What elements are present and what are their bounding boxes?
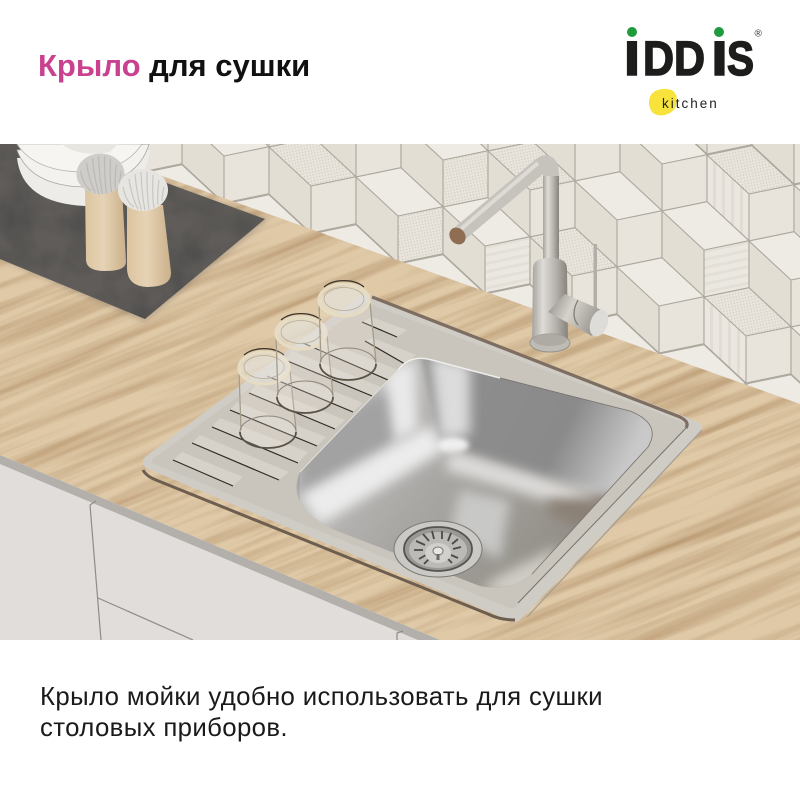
slate board bbox=[0, 144, 270, 324]
overflow slots bbox=[352, 423, 373, 447]
logo: iDDiS kitchen bbox=[624, 27, 762, 115]
description text: Крыло мойки удобно использовать для сушки bbox=[40, 683, 603, 711]
drain strainer bbox=[394, 521, 482, 577]
faucet spout bbox=[458, 163, 551, 262]
logo wordmark: D bbox=[643, 33, 674, 86]
drinking glass 2 bbox=[275, 314, 333, 413]
yellow blob bbox=[649, 89, 677, 115]
logo green dot right bbox=[714, 27, 724, 37]
wooden countertop bbox=[0, 176, 800, 640]
logo wordmark: S bbox=[727, 33, 754, 86]
faucet handle bbox=[548, 294, 608, 336]
rim grooves bbox=[143, 470, 515, 620]
faucet body bbox=[532, 258, 568, 342]
logo subtitle: kitchen bbox=[662, 96, 719, 111]
drinking glass 1 bbox=[238, 349, 296, 448]
faucet bbox=[446, 163, 612, 352]
drinking glass 3 bbox=[318, 281, 376, 380]
logo wordmark: D bbox=[674, 33, 705, 86]
logo wordmark: I bbox=[624, 33, 640, 86]
title: Крыло для сушки bbox=[38, 48, 310, 83]
description text bbox=[40, 683, 603, 742]
sink rim bbox=[150, 301, 695, 615]
wooden grinder right bbox=[118, 169, 171, 287]
sink bowl bbox=[297, 350, 660, 600]
lower cabinets bbox=[0, 455, 440, 640]
photo: kitchen sink scene bbox=[0, 144, 800, 640]
logo wordmark bbox=[624, 33, 754, 86]
sink deck bbox=[155, 306, 684, 606]
stacked white bowls bbox=[17, 144, 150, 206]
tiled backsplash bbox=[144, 144, 800, 404]
faucet base bbox=[530, 334, 570, 352]
wooden grinder left bbox=[76, 154, 126, 271]
spout end cap bbox=[449, 228, 466, 244]
faucet lever bbox=[594, 244, 597, 310]
registered mark: ® bbox=[754, 28, 762, 40]
drainboard ribs bbox=[173, 317, 416, 486]
stainless steel sink bbox=[143, 281, 702, 620]
description text: столовых приборов. bbox=[40, 714, 288, 742]
logo wordmark: I bbox=[712, 33, 728, 86]
logo green dot left bbox=[627, 27, 637, 37]
